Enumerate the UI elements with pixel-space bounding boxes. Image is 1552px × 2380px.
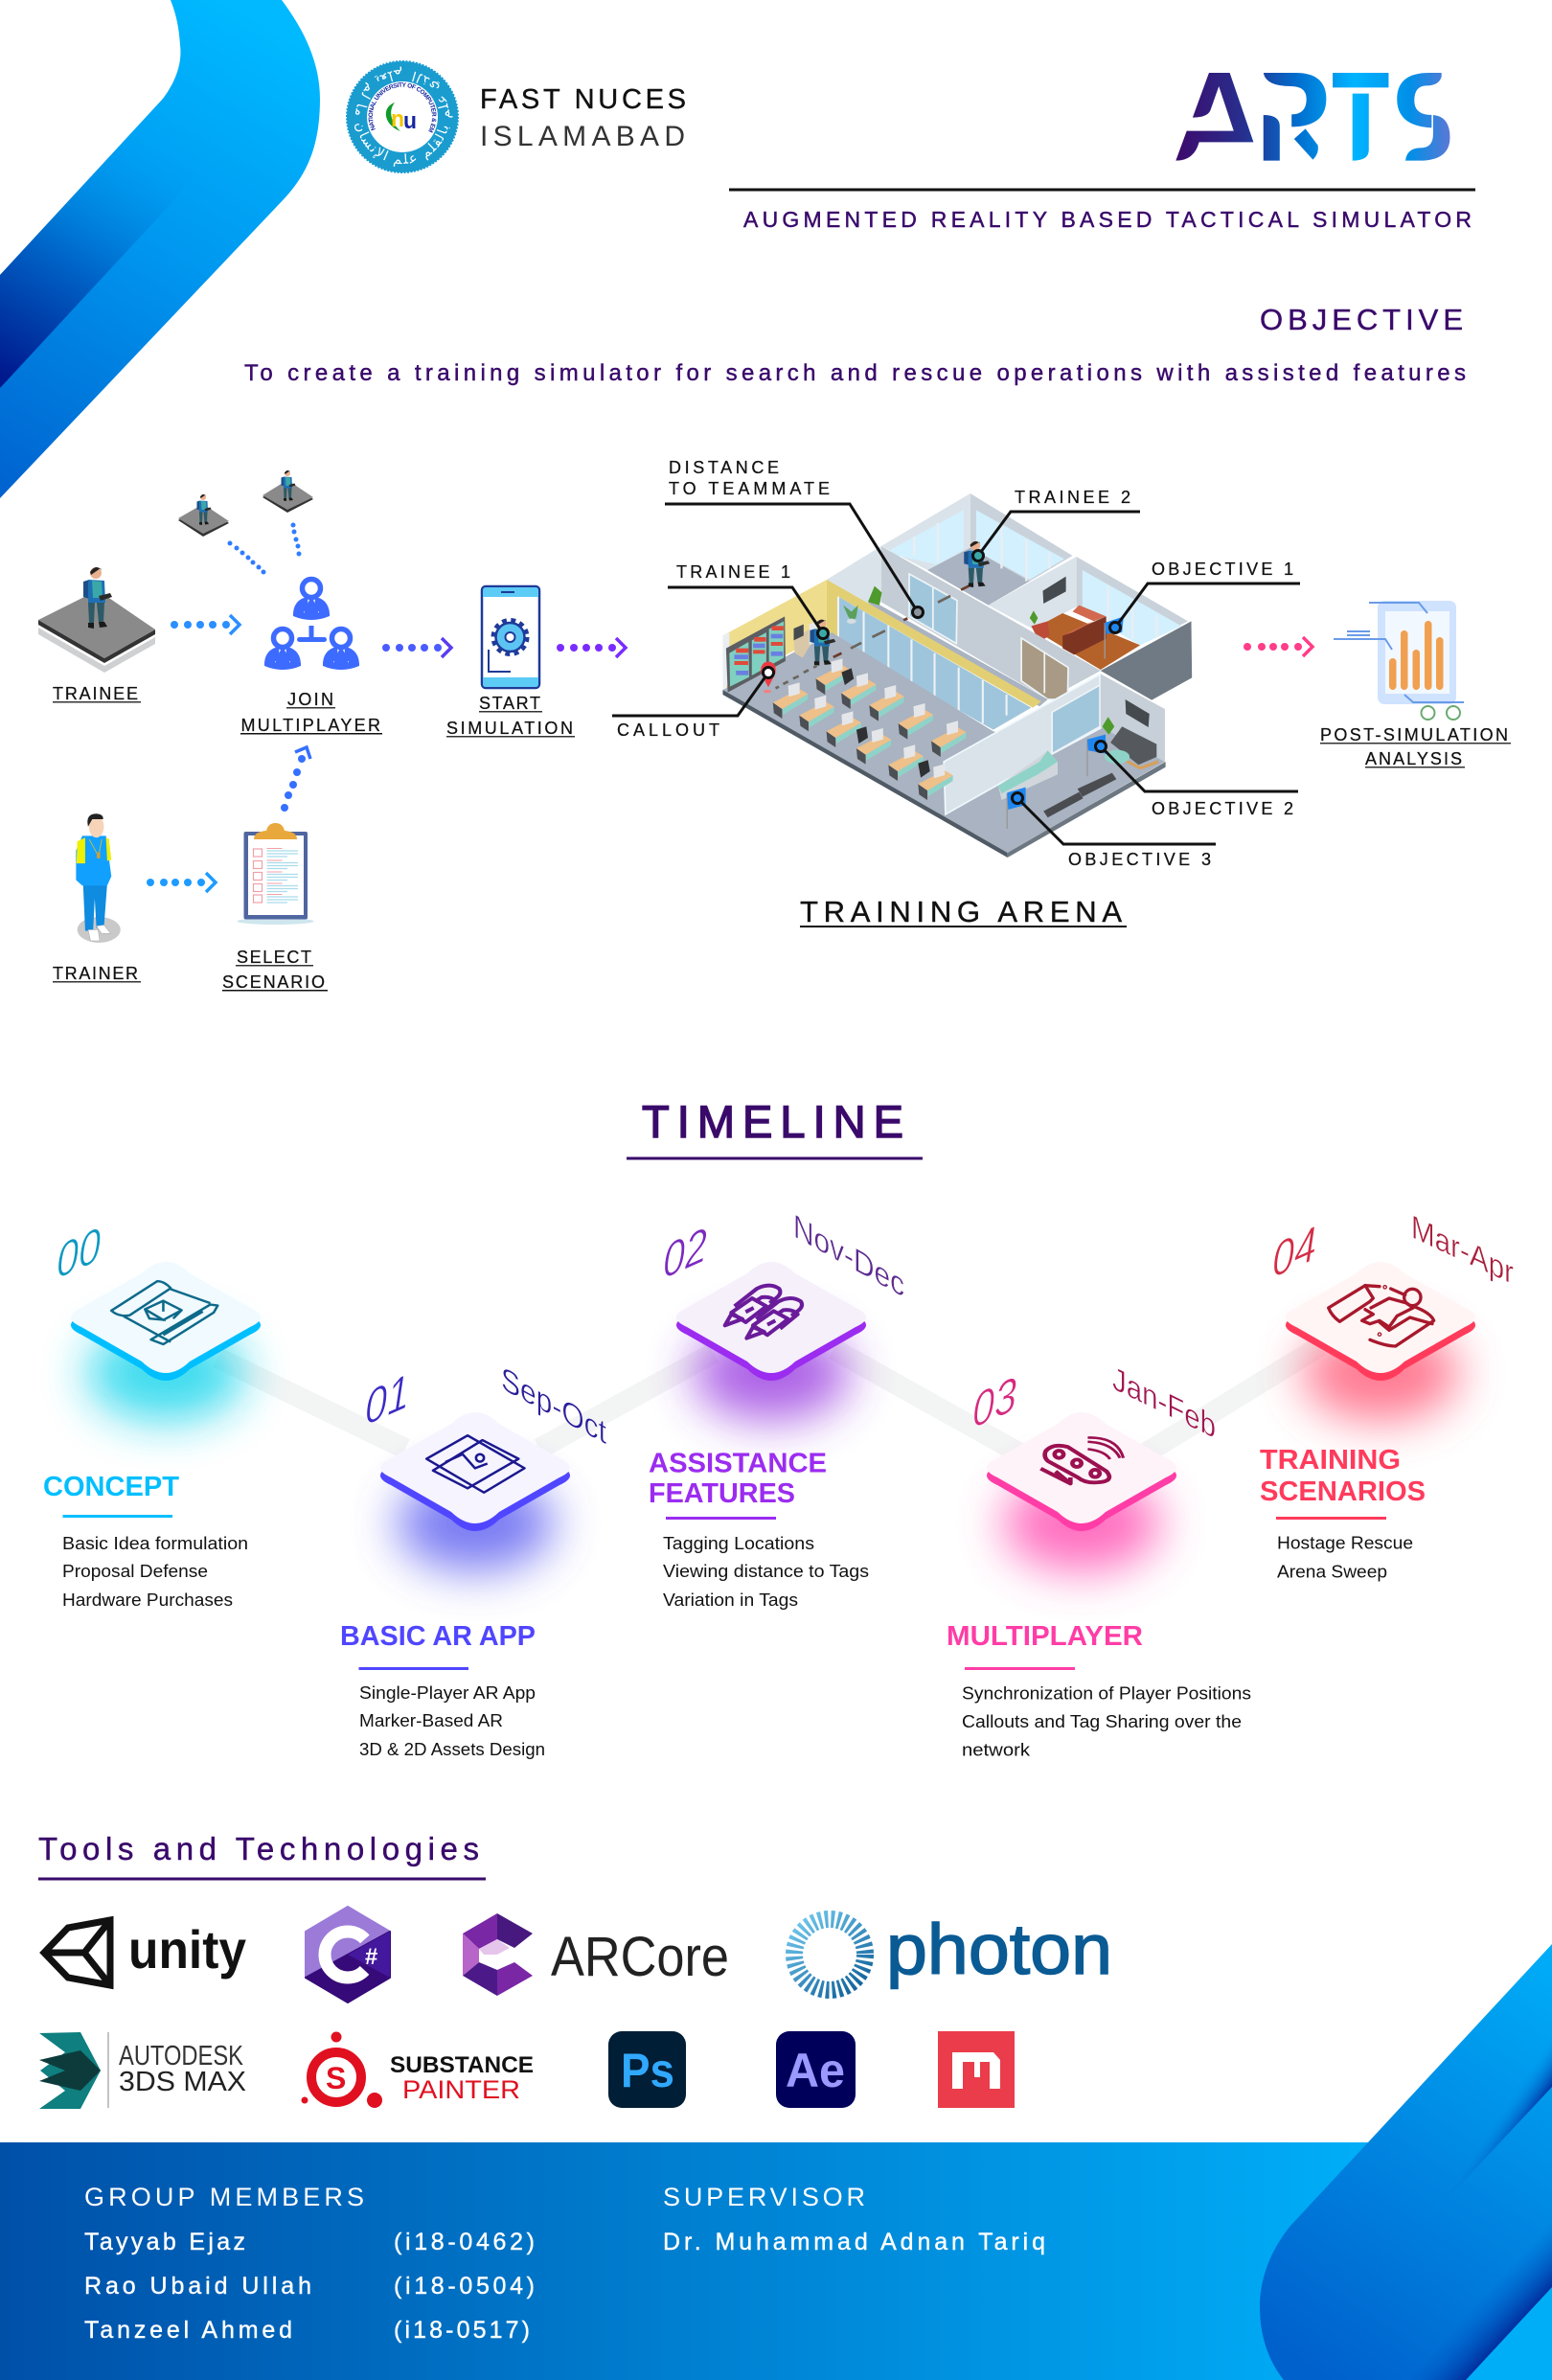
university logo: u xyxy=(403,108,417,134)
dotted links from remote trainees xyxy=(228,523,301,575)
step 00 text: Proposal Defense xyxy=(62,1562,208,1581)
step 03 text: Callouts and Tag Sharing over the xyxy=(962,1712,1242,1731)
step 01 number: 01 xyxy=(365,1364,409,1436)
member list: Tanzeel Ahmed xyxy=(84,2317,292,2344)
join multiplayer label xyxy=(240,690,382,735)
callout labels xyxy=(617,458,1293,869)
step 02 text: ASSISTANCE xyxy=(649,1449,827,1479)
icon: join multiplayer xyxy=(264,579,359,670)
callout labels: TRAINEE 2 xyxy=(1015,488,1130,507)
step 02 text xyxy=(649,1449,869,1610)
logo: Substance Painter xyxy=(301,2031,534,2108)
logo: C sharp xyxy=(306,1907,390,2002)
footer band xyxy=(0,2142,1552,2380)
step 01 date: Sep-Oct xyxy=(501,1359,606,1452)
logo: 3ds Max xyxy=(39,2032,246,2109)
logo: Photoshop: Ps xyxy=(621,2044,674,2097)
step 04: training scenarios tile xyxy=(1286,1262,1475,1421)
join multiplayer label: JOIN xyxy=(287,690,333,709)
step 03 text: Synchronization of Player Positions xyxy=(962,1684,1251,1704)
supervisor heading: SUPERVISOR xyxy=(663,2183,865,2211)
logo: Maya style red square xyxy=(938,2031,1015,2108)
select scenario label xyxy=(222,948,328,992)
logo: photon xyxy=(794,1910,1112,1990)
logo: ARCore xyxy=(463,1913,729,1996)
objective heading: OBJECTIVE xyxy=(1260,303,1463,336)
arrow: trainee to join xyxy=(171,615,240,634)
step 01 text xyxy=(340,1621,545,1759)
timeline heading: TIMELINE xyxy=(642,1096,903,1147)
select scenario label: SCENARIO xyxy=(222,973,325,992)
university name: ISLAMABAD xyxy=(480,121,685,152)
step 02 date: Nov-Dec xyxy=(793,1206,904,1305)
flow: trainee xyxy=(38,567,155,703)
step 00 number: 00 xyxy=(57,1218,101,1290)
university name: FAST NUCES xyxy=(480,84,686,115)
step 03 text: network xyxy=(962,1740,1031,1759)
arrow: start to arena xyxy=(557,638,626,657)
university logo: الذي علم بالقلم علم الإنسان ما لم يعلم xyxy=(354,67,453,167)
ARTS logo xyxy=(1175,73,1449,161)
logo: unity xyxy=(44,1919,246,1985)
trainer label: TRAINER xyxy=(53,964,138,983)
member list: (i18-0504) xyxy=(394,2273,535,2300)
logo: Photoshop xyxy=(608,2031,686,2108)
step 03 date: Jan-Feb xyxy=(1112,1359,1216,1446)
timeline connectors xyxy=(217,1346,1320,1453)
icon: phone with gear xyxy=(482,586,539,688)
member list: Rao Ubaid Ullah xyxy=(84,2273,311,2300)
step 03 text xyxy=(947,1621,1251,1759)
logo: Substance Painter: SUBSTANCE xyxy=(390,2052,534,2078)
step 04 text xyxy=(1260,1445,1426,1581)
university logo: n xyxy=(391,106,404,132)
step 00 text: CONCEPT xyxy=(43,1472,179,1502)
callout labels: OBJECTIVE 2 xyxy=(1152,799,1293,818)
arrow: trainer to scenario xyxy=(147,873,216,892)
training arena title: TRAINING ARENA xyxy=(800,895,1122,928)
post-simulation label: ANALYSIS xyxy=(1365,749,1462,768)
supervisor name: Dr. Muhammad Adnan Tariq xyxy=(663,2229,1045,2255)
member list: (i18-0517) xyxy=(394,2317,530,2344)
step 02 text: FEATURES xyxy=(649,1478,795,1509)
callout labels: TO TEAMMATE xyxy=(669,479,830,498)
step 04 text: Arena Sweep xyxy=(1277,1562,1387,1581)
step 02 text: Variation in Tags xyxy=(663,1590,798,1610)
header rule xyxy=(729,188,1475,192)
step 04 text: Hostage Rescue xyxy=(1277,1533,1413,1552)
step 00 text: Hardware Purchases xyxy=(62,1590,233,1610)
callout labels: TRAINEE 1 xyxy=(676,562,790,582)
subtitle: AUGMENTED REALITY BASED TACTICAL SIMULATOR xyxy=(743,207,1472,232)
group members heading: GROUP MEMBERS xyxy=(84,2183,364,2211)
callout labels: DISTANCE xyxy=(669,458,779,477)
logo: ARCore: ARCore xyxy=(551,1926,729,1988)
step 03 text: MULTIPLAYER xyxy=(947,1621,1143,1652)
step 04 date: Mar-Apr xyxy=(1411,1208,1514,1293)
step 02 number: 02 xyxy=(663,1218,707,1290)
figure: trainer xyxy=(76,813,121,943)
post-simulation label xyxy=(1320,725,1511,768)
step 01 text: Marker-Based AR xyxy=(359,1711,503,1730)
logo: photon: photon xyxy=(886,1910,1112,1989)
icon: clipboard xyxy=(238,823,314,925)
logo: 3ds Max: AUTODESK xyxy=(119,2041,244,2071)
background swoosh: bottom right xyxy=(1260,1944,1552,2380)
step 03 number: 03 xyxy=(972,1367,1016,1439)
logo: Substance Painter: S xyxy=(326,2061,346,2095)
step 04 number: 04 xyxy=(1272,1217,1316,1289)
step 00: concept tile xyxy=(71,1262,261,1421)
logo: C sharp: # xyxy=(365,1944,377,1970)
start simulation label xyxy=(446,694,575,738)
step 04 text: SCENARIOS xyxy=(1260,1476,1426,1507)
step 01 text: BASIC AR APP xyxy=(340,1621,536,1652)
member list xyxy=(84,2229,535,2344)
start simulation label: SIMULATION xyxy=(446,719,573,738)
step 04 text: TRAINING xyxy=(1260,1445,1401,1476)
callout labels: OBJECTIVE 3 xyxy=(1068,850,1211,869)
step 01 text: Single-Player AR App xyxy=(359,1683,536,1703)
arrow: scenario to join xyxy=(281,747,310,812)
step 00 text: Basic Idea formulation xyxy=(62,1534,248,1553)
select scenario label: SELECT xyxy=(237,948,311,967)
background swoosh: top left xyxy=(0,0,320,498)
logo: After Effects: Ae xyxy=(786,2044,845,2097)
training arena illustration xyxy=(722,493,1192,858)
tools heading: Tools and Technologies xyxy=(38,1831,479,1866)
logo: 3ds Max: 3DS MAX xyxy=(119,2067,246,2097)
step 01 text: 3D & 2D Assets Design xyxy=(359,1740,545,1759)
logo: Substance Painter: PAINTER xyxy=(402,2075,520,2104)
arena callouts xyxy=(612,504,1300,844)
member list: (i18-0462) xyxy=(394,2229,535,2255)
logo: unity: unity xyxy=(128,1919,246,1980)
step 00 text xyxy=(43,1472,248,1610)
start simulation label: START xyxy=(479,694,540,713)
logo: After Effects xyxy=(776,2031,856,2108)
member list: Tayyab Ejaz xyxy=(84,2229,245,2255)
step 02 text: Tagging Locations xyxy=(663,1534,814,1553)
post-simulation label: POST-SIMULATION xyxy=(1320,725,1508,744)
step 02: assistance features tile xyxy=(676,1262,866,1421)
step 03: multiplayer tile xyxy=(987,1412,1176,1571)
callout labels: OBJECTIVE 1 xyxy=(1152,560,1293,579)
arrow: join to start xyxy=(382,638,451,657)
step 01: basic AR app tile xyxy=(380,1412,570,1571)
step 02 text: Viewing distance to Tags xyxy=(663,1562,869,1581)
objective text: To create a training simulator for search and rescue operations with assisted features xyxy=(244,360,1466,386)
icon: analysis chart xyxy=(1334,601,1464,720)
university name xyxy=(480,84,686,152)
join multiplayer label: MULTIPLAYER xyxy=(241,716,380,735)
flow: trainee: TRAINEE xyxy=(53,684,138,703)
flow: remote trainees xyxy=(178,470,313,537)
arrow: arena to analysis xyxy=(1244,637,1312,656)
callout labels: CALLOUT xyxy=(617,721,719,740)
